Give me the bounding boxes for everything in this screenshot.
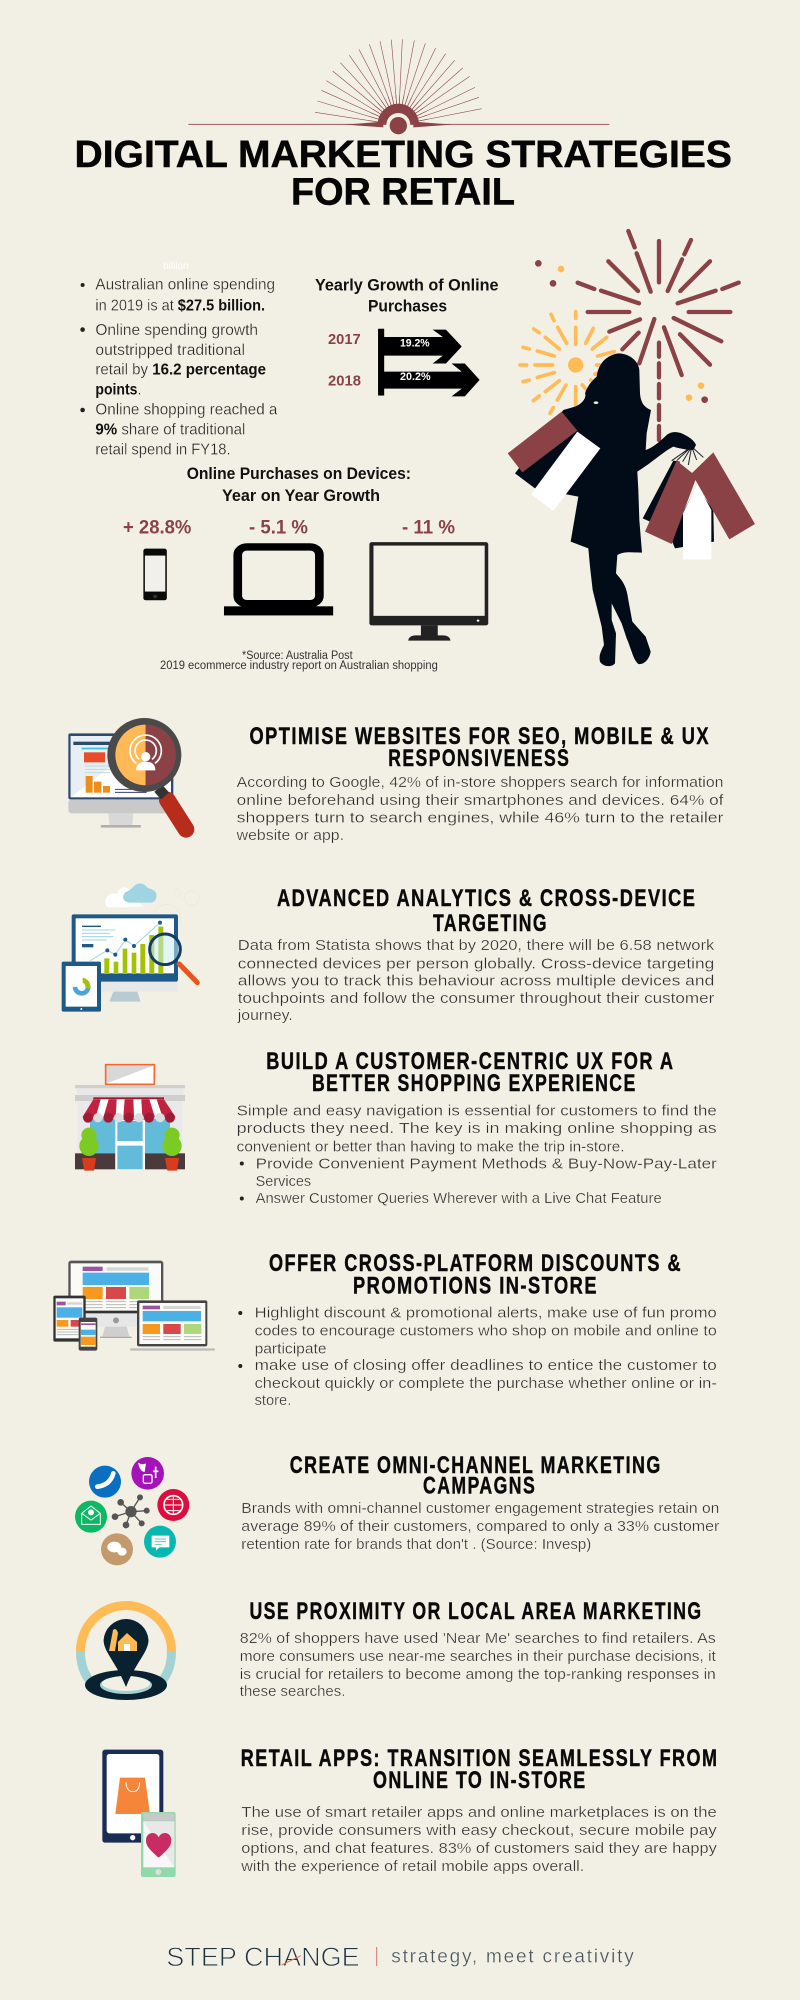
body text: connected devices per person globally. Cross-device targeting [238,956,714,972]
panel: australian online spending facts: Australian online spending [95,277,275,294]
heading: RESPONSIVENESS [388,745,570,772]
heading: BETTER SHOPPING EXPERIENCE [312,1070,637,1097]
body text: convenient or better than having to make the trip in-store. [237,1139,624,1155]
panel: retail apps [102,1745,718,1877]
panel: australian online spending facts: retail spend in FY18. [95,442,231,458]
sunburst emblem [188,39,609,137]
panel: yearly growth of online purchases [315,277,498,396]
icon: omni-channel network [75,1457,189,1565]
source note [160,650,438,672]
icon: tablet and phone shopping [102,1750,176,1877]
body text: Answer Customer Queries Wherever with a Live Chat Feature [256,1191,662,1207]
icon: location pin [80,1606,172,1700]
illustration: fireworks [520,231,739,440]
body text: Brands with omni-channel customer engagement strategies retain on [241,1501,719,1517]
panel: customer-centric ux [75,1048,717,1207]
heading [290,1452,662,1500]
panel: australian online spending facts: outstripped traditional [95,342,245,359]
bag handles [672,447,703,465]
heading [277,885,696,937]
arrow chart [328,329,480,396]
left bags [508,412,577,472]
heading: devices year on year: Online Purchases on Devices: [187,465,411,483]
right bags back layer [643,461,714,548]
stat: laptop growth: - 5.1 % [249,517,308,538]
body text [240,1631,716,1700]
body text [237,938,715,1024]
heading: CREATE OMNI-CHANNEL MARKETING [290,1452,662,1479]
panel: australian online spending facts: points. [95,382,141,399]
heading: yearly growth: Purchases [368,297,447,315]
heading: PROMOTIONS IN-STORE [353,1272,598,1299]
footer logo and tagline [166,1942,634,1972]
body text: codes to encourage customers who shop on mobile and online to [255,1323,717,1339]
panel: australian online spending facts: Online shopping reached a [95,402,278,419]
body text: average 89% of their customers, compared to only a 33% customer [241,1519,720,1535]
heading [269,1250,682,1299]
body text: these searches. [240,1684,345,1700]
body text [241,1501,720,1553]
body text: touchpoints and follow the consumer throughout their customer [238,991,714,1007]
panel: australian online spending facts [80,261,278,458]
panel: australian online spending facts: billion [163,261,189,272]
body text: products they need. The key is in making online shopping as [237,1121,717,1137]
body text: 82% of shoppers have used 'Near Me' searches to find retailers. As [240,1631,716,1647]
body text: checkout quickly or complete the purchase whether online or in- [255,1376,717,1392]
heading: devices year on year: Year on Year Growth [222,487,380,505]
heading: yearly growth: Yearly Growth of Online [315,277,498,295]
body text: website or app. [236,828,344,844]
heading: TARGETING [433,910,548,937]
panel: omni-channel marketing [75,1452,720,1565]
panel: australian online spending facts: in 2019 is at $27.5 billion. [95,298,265,314]
panel: australian online spending facts: 9% share of traditional [95,422,245,439]
arrow chart: 19.2% [400,338,430,350]
heading [250,723,710,772]
body text: shoppers turn to search engines, while 46% turn to the retailer [237,810,724,826]
title [74,134,732,214]
heading [241,1745,718,1794]
body text: The use of smart retailer apps and online marketplaces is on the [241,1805,717,1821]
icon: storefront [75,1065,185,1171]
body text: Highlight discount & promotional alerts, make use of fun promo [255,1306,717,1322]
panel: australian online spending facts: Online spending growth [95,322,258,339]
icon: phone [143,549,167,600]
body text: Simple and easy navigation is essential for customers to find the [237,1103,717,1119]
arrow chart: 2018 [328,373,361,390]
body text: allows you to track this behaviour across multiple devices and [238,973,714,989]
heading: CAMPAGNS [423,1472,536,1500]
icon: analytics dashboard [62,883,199,1012]
heading: BUILD A CUSTOMER-CENTRIC UX FOR A [266,1048,674,1075]
body text: rise, provide consumers with easy checkout, secure mobile pay [241,1823,718,1839]
body text: online beforehand using their smartphones and devices. 64% of [237,793,725,809]
panel: online purchases on devices [123,465,488,672]
body text: According to Google, 42% of in-store shoppers search for information [237,775,723,791]
icon: responsive devices [53,1261,215,1351]
footer logo and tagline: STEP CHANGE [166,1942,360,1972]
body text: options, and chat features. 83% of customers said they are happy [241,1841,718,1857]
title: DIGITAL MARKETING STRATEGIES [74,134,732,176]
body text: store. [255,1393,291,1409]
panel: australian online spending facts: retail by 16.2 percentage [95,362,266,379]
body text [237,1103,717,1207]
heading [266,1048,674,1097]
source note: *Source: Australia Post [242,650,353,662]
right bags front layer [692,452,755,539]
body text: participate [255,1342,326,1358]
footer logo and tagline: strategy, meet creativity [391,1947,634,1968]
panel: cross-platform discounts [53,1250,717,1409]
body text [236,775,725,844]
stat: mobile growth: + 28.8% [123,517,191,538]
body text: Data from Statista shows that by 2020, there will be 6.58 network [238,938,715,954]
illustration: woman silhouette with shopping bags [508,353,755,666]
body text: more consumers use near-me searches in their purchase decisions, it [240,1649,716,1665]
panel: optimise websites [68,718,725,844]
title: FOR RETAIL [291,172,515,214]
stat: desktop growth: - 11 % [402,517,455,538]
body text: with the experience of retail mobile apps overall. [240,1859,584,1875]
body text: Provide Convenient Payment Methods & Buy-Now-Pay-Later [256,1156,717,1172]
body text: retention rate for brands that don't . (Source: Invesp) [241,1537,591,1553]
panel: advanced analytics [62,883,715,1024]
body text [240,1805,718,1875]
silhouette body [515,353,696,666]
heading: yearly growth [315,277,498,315]
heading: devices year on year [187,465,411,505]
body text: make use of closing offer deadlines to entice the customer to [255,1358,717,1374]
heading: ONLINE TO IN-STORE [373,1767,587,1794]
body text: is crucial for retailers to become among the top-ranking responses in [240,1667,716,1683]
icon: desktop monitor [369,542,488,641]
body text: journey. [237,1008,293,1024]
body text [238,1306,717,1409]
body text: Services [256,1174,311,1190]
arrow chart: 20.2% [400,371,431,383]
panel: proximity marketing [80,1598,716,1700]
icon: monitor with magnifier [68,718,186,829]
arrow chart: 2017 [328,331,361,348]
source note: 2019 ecommerce industry report on Australian shopping [160,660,438,672]
icon: laptop [224,547,333,615]
